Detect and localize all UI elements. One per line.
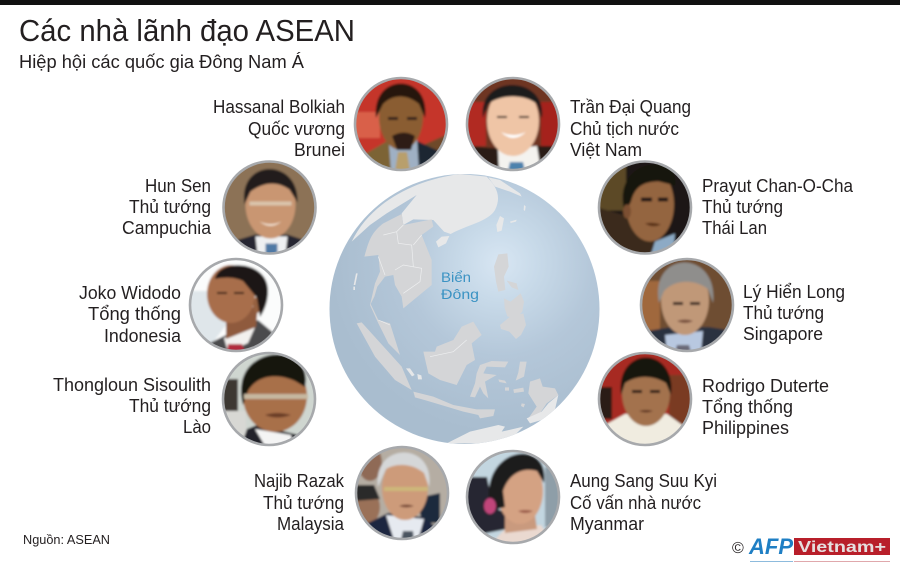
portrait: Joko Widodo [189,258,283,352]
source note: Nguồn: ASEAN [23,532,110,547]
sea label: Biển [441,269,471,285]
label: Prayut Chan-O-Cha: Prayut Chan-O-Cha [702,176,854,196]
label: Hun Sen: Thủ tướng [129,197,211,217]
map: China and northern land [352,174,498,242]
label: Prayut Chan-O-Cha: Thủ tướng [702,197,783,217]
label: Prayut Chan-O-Cha: Thái Lan [702,218,767,238]
portrait: Rodrigo Duterte [598,352,693,446]
map: Japan islands [488,177,526,223]
label: Najib Razak: Najib Razak [254,471,345,491]
label: Ly Hien Long: Thủ tướng [743,303,824,323]
logo: AFP Vietnam+ [732,534,890,559]
label: Rodrigo Duterte: Tổng thống [702,397,793,417]
map: Sumatra [357,322,412,390]
label: Joko Widodo [79,283,182,346]
logo: AFP Vietnam+: AFP [748,534,793,559]
title: Các nhà lãnh đạo ASEAN [19,13,355,48]
label: Joko Widodo: Tổng thống [88,304,181,324]
label: Hassanal Bolkiah: Quốc vương [248,119,345,139]
label: Tran Dai Quang: Chủ tịch nước [570,119,679,139]
label: Najib Razak: Thủ tướng [263,493,344,513]
label: Joko Widodo: Indonesia [104,326,182,346]
label: Hun Sen: Campuchia [122,218,212,238]
label: Tran Dai Quang [570,97,691,160]
portrait: Hun Sen [222,160,316,254]
globe map of Southeast Asia [330,174,600,444]
logo: AFP Vietnam+: Vietnam+ [798,539,886,556]
label: Rodrigo Duterte [702,376,829,438]
map: Taiwan [496,216,504,232]
portrait: Ly Hien Long [640,258,734,352]
label: Ly Hien Long: Lý Hiển Long [743,282,845,302]
map: small islands west [353,273,422,379]
label: Rodrigo Duterte: Rodrigo Duterte [702,376,829,396]
label: Thongloun Sisoulith: Lào [183,417,211,437]
sea label: Đông [441,286,479,302]
portrait: Najib Razak [352,445,449,540]
label: Najib Razak [254,471,345,534]
map: Java and lesser islands [413,392,495,418]
map: Australia [447,425,523,443]
label: Aung Sang Suu Kyi: Aung Sang Suu Kyi [570,471,717,491]
label: Hassanal Bolkiah: Hassanal Bolkiah [213,97,345,117]
label: Tran Dai Quang: Việt Nam [570,140,642,160]
map: Borneo [423,322,482,385]
label: Thongloun Sisoulith [53,375,211,437]
label: Thongloun Sisoulith: Thủ tướng [129,396,211,416]
label: Hun Sen [122,176,212,238]
label: Hassanal Bolkiah [213,97,345,160]
label: Tran Dai Quang: Trần Đại Quang [570,97,691,117]
label: Thongloun Sisoulith: Thongloun Sisoulith [53,375,211,395]
label: Aung Sang Suu Kyi: Cố vấn nhà nước [570,493,701,513]
label: Najib Razak: Malaysia [277,514,345,534]
label: Rodrigo Duterte: Philippines [702,418,789,438]
map: Hainan [436,236,449,247]
map: Maluku islands [498,362,527,407]
portrait: Thongloun Sisoulith [222,352,316,446]
map: border lines [378,225,467,357]
portrait: Prayut Chan-O-Cha [598,160,692,254]
map: Sulawesi [470,361,508,398]
portrait: Aung San Suu Kyi [466,450,560,544]
bottom clipped strip [750,561,890,562]
portrait: Tran Dai Quang [466,77,561,171]
label: Hassanal Bolkiah: Brunei [294,140,345,160]
map: Philippines [494,253,526,339]
sea label [441,269,479,302]
label: Joko Widodo: Joko Widodo [79,283,181,303]
label: Ly Hien Long [743,282,845,344]
label: Aung Sang Suu Kyi [570,471,717,534]
label: Aung Sang Suu Kyi: Myanmar [570,514,644,534]
map: New Guinea [528,378,558,418]
top black bar [0,0,900,5]
portrait: Hassanal Bolkiah [354,77,448,171]
label: Prayut Chan-O-Cha [702,176,854,238]
label: Ly Hien Long: Singapore [743,324,823,344]
label: Hun Sen: Hun Sen [145,176,211,196]
subtitle: Hiệp hội các quốc gia Đông Nam Á [19,52,304,72]
map: mainland Southeast Asia [364,214,433,355]
logo: AFP Vietnam+: © [732,540,744,557]
